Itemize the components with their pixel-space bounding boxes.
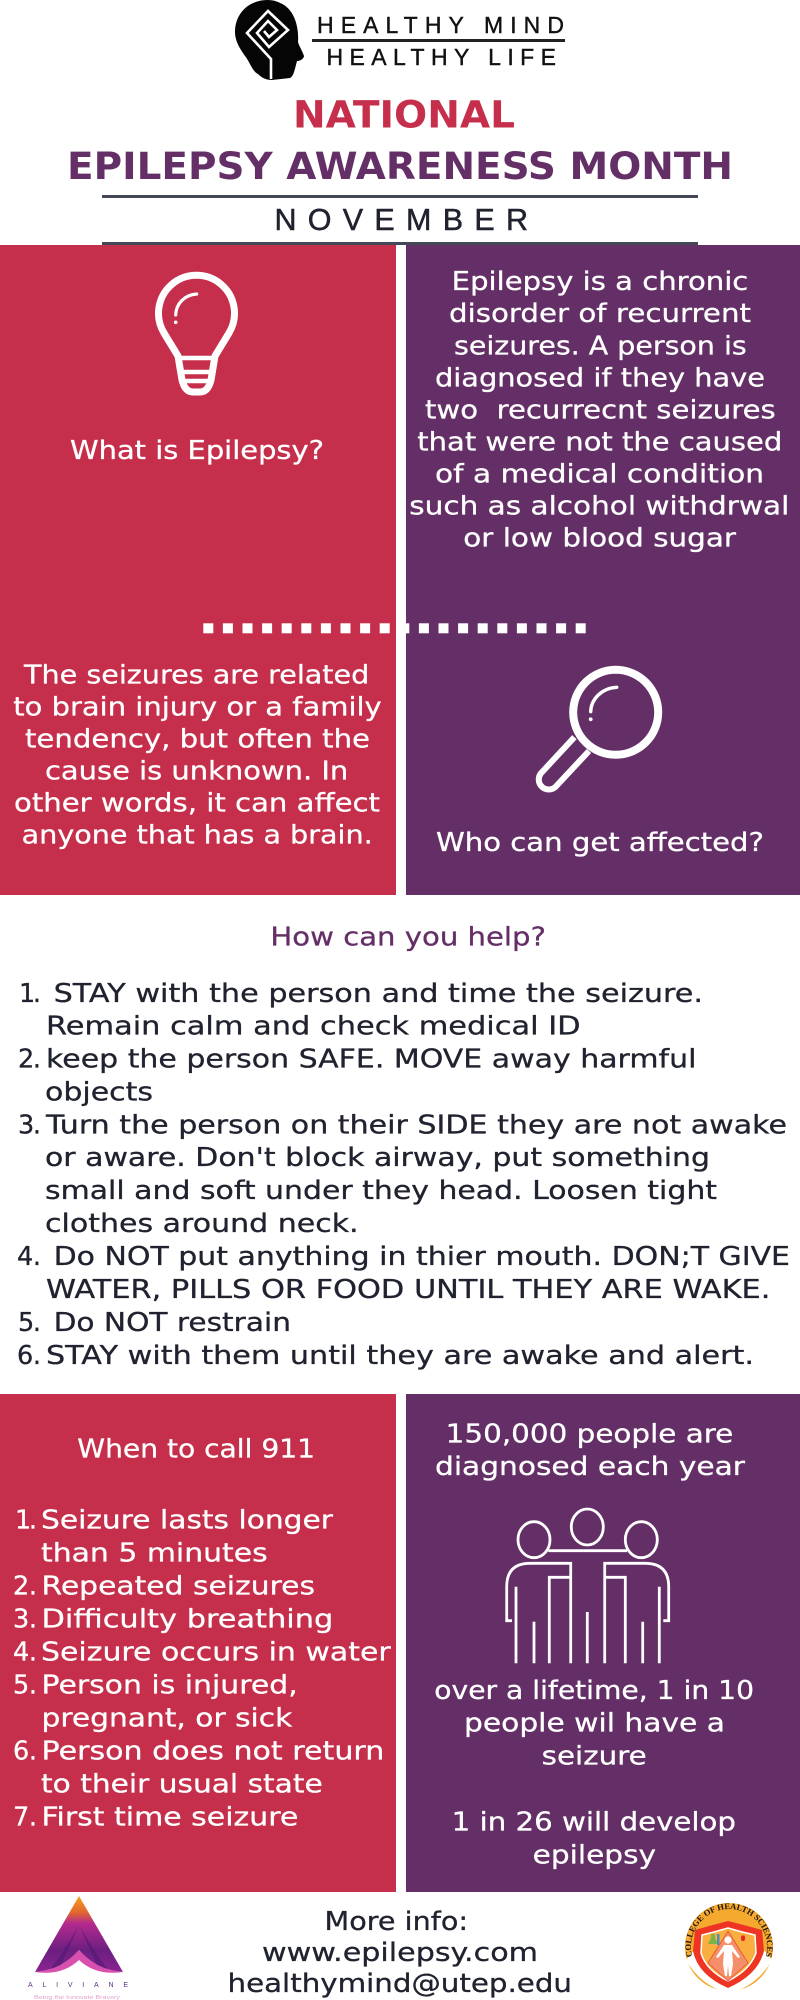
numbered list: when to call: pregnant, or sick <box>42 1703 293 1733</box>
numbered list: how to help: 2. <box>18 1044 41 1074</box>
logo: College of Health Sciences seal <box>685 1903 773 1990</box>
text block: causes: cause is unknown. In <box>45 756 348 786</box>
icon: head silhouette with spiral <box>235 0 304 80</box>
numbered list: how to help: Turn the person on their SIDE they are not awake <box>45 1110 787 1140</box>
text block: definition of epilepsy: or low blood sugar <box>463 524 737 554</box>
numbered list: when to call: Person is injured, <box>42 1670 298 1700</box>
logo divider <box>312 39 565 42</box>
numbered list: when to call: First time seizure <box>42 1802 298 1832</box>
icon: light bulb <box>158 275 235 392</box>
numbered list: when to call: Difficulty breathing <box>42 1604 333 1634</box>
stat: lifetime risk: people wil have a <box>464 1709 725 1739</box>
text block: causes <box>13 660 382 850</box>
stat: lifetime risk: over a lifetime, 1 in 10 <box>434 1676 754 1706</box>
panel: statistics <box>406 1394 800 1892</box>
numbered list: when to call <box>13 1505 391 1832</box>
text block: definition of epilepsy <box>409 267 789 554</box>
text block: definition of epilepsy: disorder of recurrent <box>449 299 751 329</box>
logo: Aliviane <box>28 1896 128 2000</box>
icon: three people <box>507 1509 669 1663</box>
dotted divider <box>203 623 586 633</box>
text block: definition of epilepsy: that were not the caused <box>417 427 782 457</box>
numbered list: how to help: Do NOT put anything in thier mouth. DON;T GIVE <box>54 1242 790 1272</box>
numbered list: when to call: 7. <box>13 1802 37 1832</box>
numbered list: when to call: Repeated seizures <box>42 1571 315 1601</box>
numbered list: how to help: clothes around neck. <box>45 1209 359 1239</box>
numbered list: how to help <box>17 979 790 1371</box>
text block: definition of epilepsy: seizures. A person is <box>454 331 747 361</box>
numbered list: how to help: 5. <box>18 1308 41 1338</box>
numbered list: when to call: 4. <box>13 1637 37 1667</box>
text block: causes: to brain injury or a family <box>13 692 382 722</box>
stat: develop epilepsy: 1 in 26 will develop <box>452 1808 736 1838</box>
numbered list: how to help: 6. <box>17 1341 41 1371</box>
text block: causes: The seizures are related <box>23 660 369 690</box>
title: National: NATIONAL <box>293 93 515 137</box>
icon: magnifying glass <box>539 670 658 789</box>
stat: diagnosed each year: 150,000 people are <box>446 1419 733 1449</box>
numbered list: when to call: 3. <box>13 1604 37 1634</box>
panel: definition (purple column) <box>406 245 800 895</box>
numbered list: when to call: 1. <box>15 1505 37 1535</box>
stat: develop epilepsy: epilepsy <box>533 1840 656 1870</box>
numbered list: when to call: 2. <box>13 1571 37 1601</box>
stat: lifetime risk: seizure <box>542 1741 647 1771</box>
numbered list: how to help: objects <box>45 1077 153 1107</box>
numbered list: how to help: small and soft under they head. Loosen tight <box>45 1176 717 1206</box>
footer: more info: More info: <box>324 1907 468 1937</box>
numbered list: when to call: than 5 minutes <box>41 1538 268 1568</box>
numbered list: how to help: 4. <box>17 1242 41 1272</box>
text block: causes: tendency, but often the <box>25 724 370 754</box>
numbered list: how to help: keep the person SAFE. MOVE away harmful <box>46 1044 696 1074</box>
numbered list: how to help: 1. <box>19 979 41 1009</box>
heading: how can you help: How can you help? <box>270 923 546 953</box>
numbered list: how to help: STAY with them until they are awake and alert. <box>46 1341 754 1371</box>
logo text line two: HEALTHY LIFE <box>326 44 556 70</box>
numbered list: how to help: or aware. Don't block airway, put something <box>45 1143 710 1173</box>
logo: College of Health Sciences seal: COLLEGE OF HEALTH SCIENCES <box>685 1904 773 1957</box>
numbered list: when to call: Seizure lasts longer <box>41 1505 334 1535</box>
footer: more info: healthymind@utep.edu <box>228 1969 572 1999</box>
text block: definition of epilepsy: of a medical condition <box>435 459 764 489</box>
panel: when to call 911 <box>0 1394 396 1892</box>
numbered list: when to call: 5. <box>13 1670 37 1700</box>
footer: more info <box>228 1907 572 1999</box>
numbered list: when to call: Person does not return <box>42 1736 384 1766</box>
text block: definition of epilepsy: diagnosed if they have <box>435 363 765 393</box>
footer: more info: www.epilepsy.com <box>262 1938 538 1968</box>
stat: lifetime risk <box>434 1676 754 1771</box>
numbered list: how to help: 3. <box>18 1110 41 1140</box>
numbered list: how to help: Do NOT restrain <box>54 1308 291 1338</box>
panel: what is epilepsy (red column) <box>0 245 396 895</box>
numbered list: how to help: Remain calm and check medical ID <box>46 1012 581 1042</box>
text block: causes: anyone that has a brain. <box>22 820 373 850</box>
numbered list: how to help: STAY with the person and time the seizure. <box>54 979 703 1009</box>
stat: diagnosed each year <box>435 1419 746 1482</box>
stat: diagnosed each year: diagnosed each year <box>435 1452 746 1482</box>
header logo: Healthy Mind Healthy Life <box>235 0 565 80</box>
panel heading: when to call 911: When to call 911 <box>77 1435 315 1465</box>
text block: causes: other words, it can affect <box>14 788 380 818</box>
logo: Aliviane: ALIVIANE <box>28 1982 128 1989</box>
stat: develop epilepsy <box>452 1808 736 1870</box>
logo text line one: HEALTHY MIND <box>317 12 564 38</box>
text block: definition of epilepsy: Epilepsy is a chronic <box>452 267 748 297</box>
text block: definition of epilepsy: such as alcohol withdrwal <box>409 491 789 521</box>
numbered list: when to call: Seizure occurs in water <box>41 1637 391 1667</box>
subtitle: November with rules: NOVEMBER <box>274 203 528 237</box>
question: what is epilepsy: What is Epilepsy? <box>70 436 324 466</box>
numbered list: how to help: WATER, PILLS OR FOOD UNTIL THEY ARE WAKE. <box>46 1275 770 1305</box>
subtitle: November with rules <box>102 195 698 245</box>
numbered list: when to call: to their usual state <box>41 1769 323 1799</box>
question: who can get affected: Who can get affected? <box>436 828 764 858</box>
numbered list: when to call: 6. <box>13 1736 37 1766</box>
text block: definition of epilepsy: two recurrecnt seizures <box>425 395 776 425</box>
title: Epilepsy Awareness Month: EPILEPSY AWARENESS MONTH <box>67 144 733 188</box>
